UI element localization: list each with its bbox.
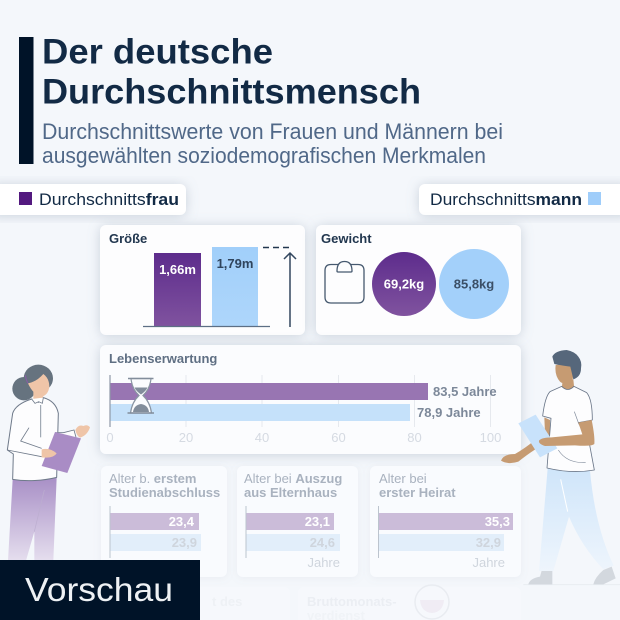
bar: Mann 78,9 Jahre [110,404,481,421]
heading: Studienabschluss [109,485,220,500]
bars: Jahre [307,555,340,570]
circle: Mann 85,8kg [439,249,509,319]
bar: Mann 1,79m [212,247,258,327]
bar: Frau 83,5 Jahre [110,383,497,400]
right arm [539,420,594,446]
title [42,32,421,112]
bar: Frau 1,66m: 1,66m [159,262,196,277]
bars: 32,9 [476,535,501,550]
panel: Größe [100,225,305,335]
circle: Frau 69,2kg [372,252,436,316]
clipboard [42,432,81,473]
heading: Alter bei [379,471,427,486]
legend: Durchschnittsmann: Durchschnitts mann [430,191,582,209]
bars: 35,3 [485,514,510,529]
bars [378,506,513,570]
title: Der deutsche [42,32,273,72]
axis labels: 20 [179,430,193,445]
heading: Gewicht: Gewicht [321,231,372,246]
icon: hourglass [128,378,154,413]
subtitle [42,119,503,168]
left arm [501,417,550,463]
circle: Frau 69,2kg: 69,2kg [384,276,424,292]
subtitle: ausgewählten soziodemografischen Merkmalen [42,143,486,168]
bars [246,506,340,570]
legend: Durchschnittsmann [419,184,620,215]
bar: Frau 1,66m [154,253,201,327]
paper [518,415,557,457]
panel: faded lower cards: Bruttomonats- [307,594,397,609]
heading: Lebenserwartung: Lebenserwartung [109,351,217,366]
illustration: woman [7,365,90,561]
hair [552,350,581,379]
axis labels: 80 [407,430,422,445]
subtitle: Durchschnittswerte von Frauen und Männern bei [42,119,503,144]
legend: Durchschnittsfrau: Durchschnitts frau [39,191,179,209]
heading: Größe: Größe [109,231,147,246]
heading: erster Heirat [379,485,456,500]
hair [12,377,36,400]
axis labels: 40 [255,430,269,445]
bar: Frau 83,5 Jahre: 83,5 Jahre [433,384,497,399]
face [28,374,49,397]
panel: Auszug aus Elternhaus [237,466,358,577]
panel: erste Heirat [370,466,521,577]
heading: Auszug [295,471,342,486]
axis labels: 100 [480,430,501,445]
axis labels: 0 [106,430,114,445]
pants [8,477,57,561]
circle: Mann 85,8kg: 85,8kg [454,276,494,292]
neck and face [562,379,574,391]
panel: Lebenserwartung [100,345,521,454]
illustration: man [501,350,620,585]
heading: erstem [154,471,196,486]
axis labels [106,430,501,445]
legend: Durchschnittsfrau [0,184,186,215]
bars: 23,1 [305,514,330,529]
bar: Mann 1,79m: 1,79m [217,256,253,271]
title accent bar [19,37,34,164]
panel: faded lower cards: t des [212,594,242,609]
bars [110,506,201,558]
icon: scale [325,262,364,303]
axis labels: 60 [331,430,346,445]
panel: faded lower cards [150,585,521,620]
shoes [528,571,552,584]
bars: 24,6 [310,535,335,550]
panel: Gewicht [316,225,521,335]
preview badge: Vorschau [0,560,200,620]
arrow: height [284,253,296,327]
heading: Alter b. [109,471,154,486]
shirt [7,398,58,481]
heading: Alter bei [244,471,295,486]
bars: 23,4 [169,514,195,529]
title: Durchschnittsmensch [42,72,421,112]
bar: Mann 78,9 Jahre: 78,9 Jahre [417,405,481,420]
bars: Jahre [472,555,505,570]
heading: aus Elternhaus [244,485,337,500]
bars: 23,9 [172,535,197,550]
pants [539,468,614,571]
preview badge: Vorschau: Vorschau [25,571,173,608]
hands [42,449,57,458]
panel: Studienabschluss [101,466,227,577]
shirt [543,386,594,472]
floor line [523,583,620,586]
title block [19,32,503,168]
